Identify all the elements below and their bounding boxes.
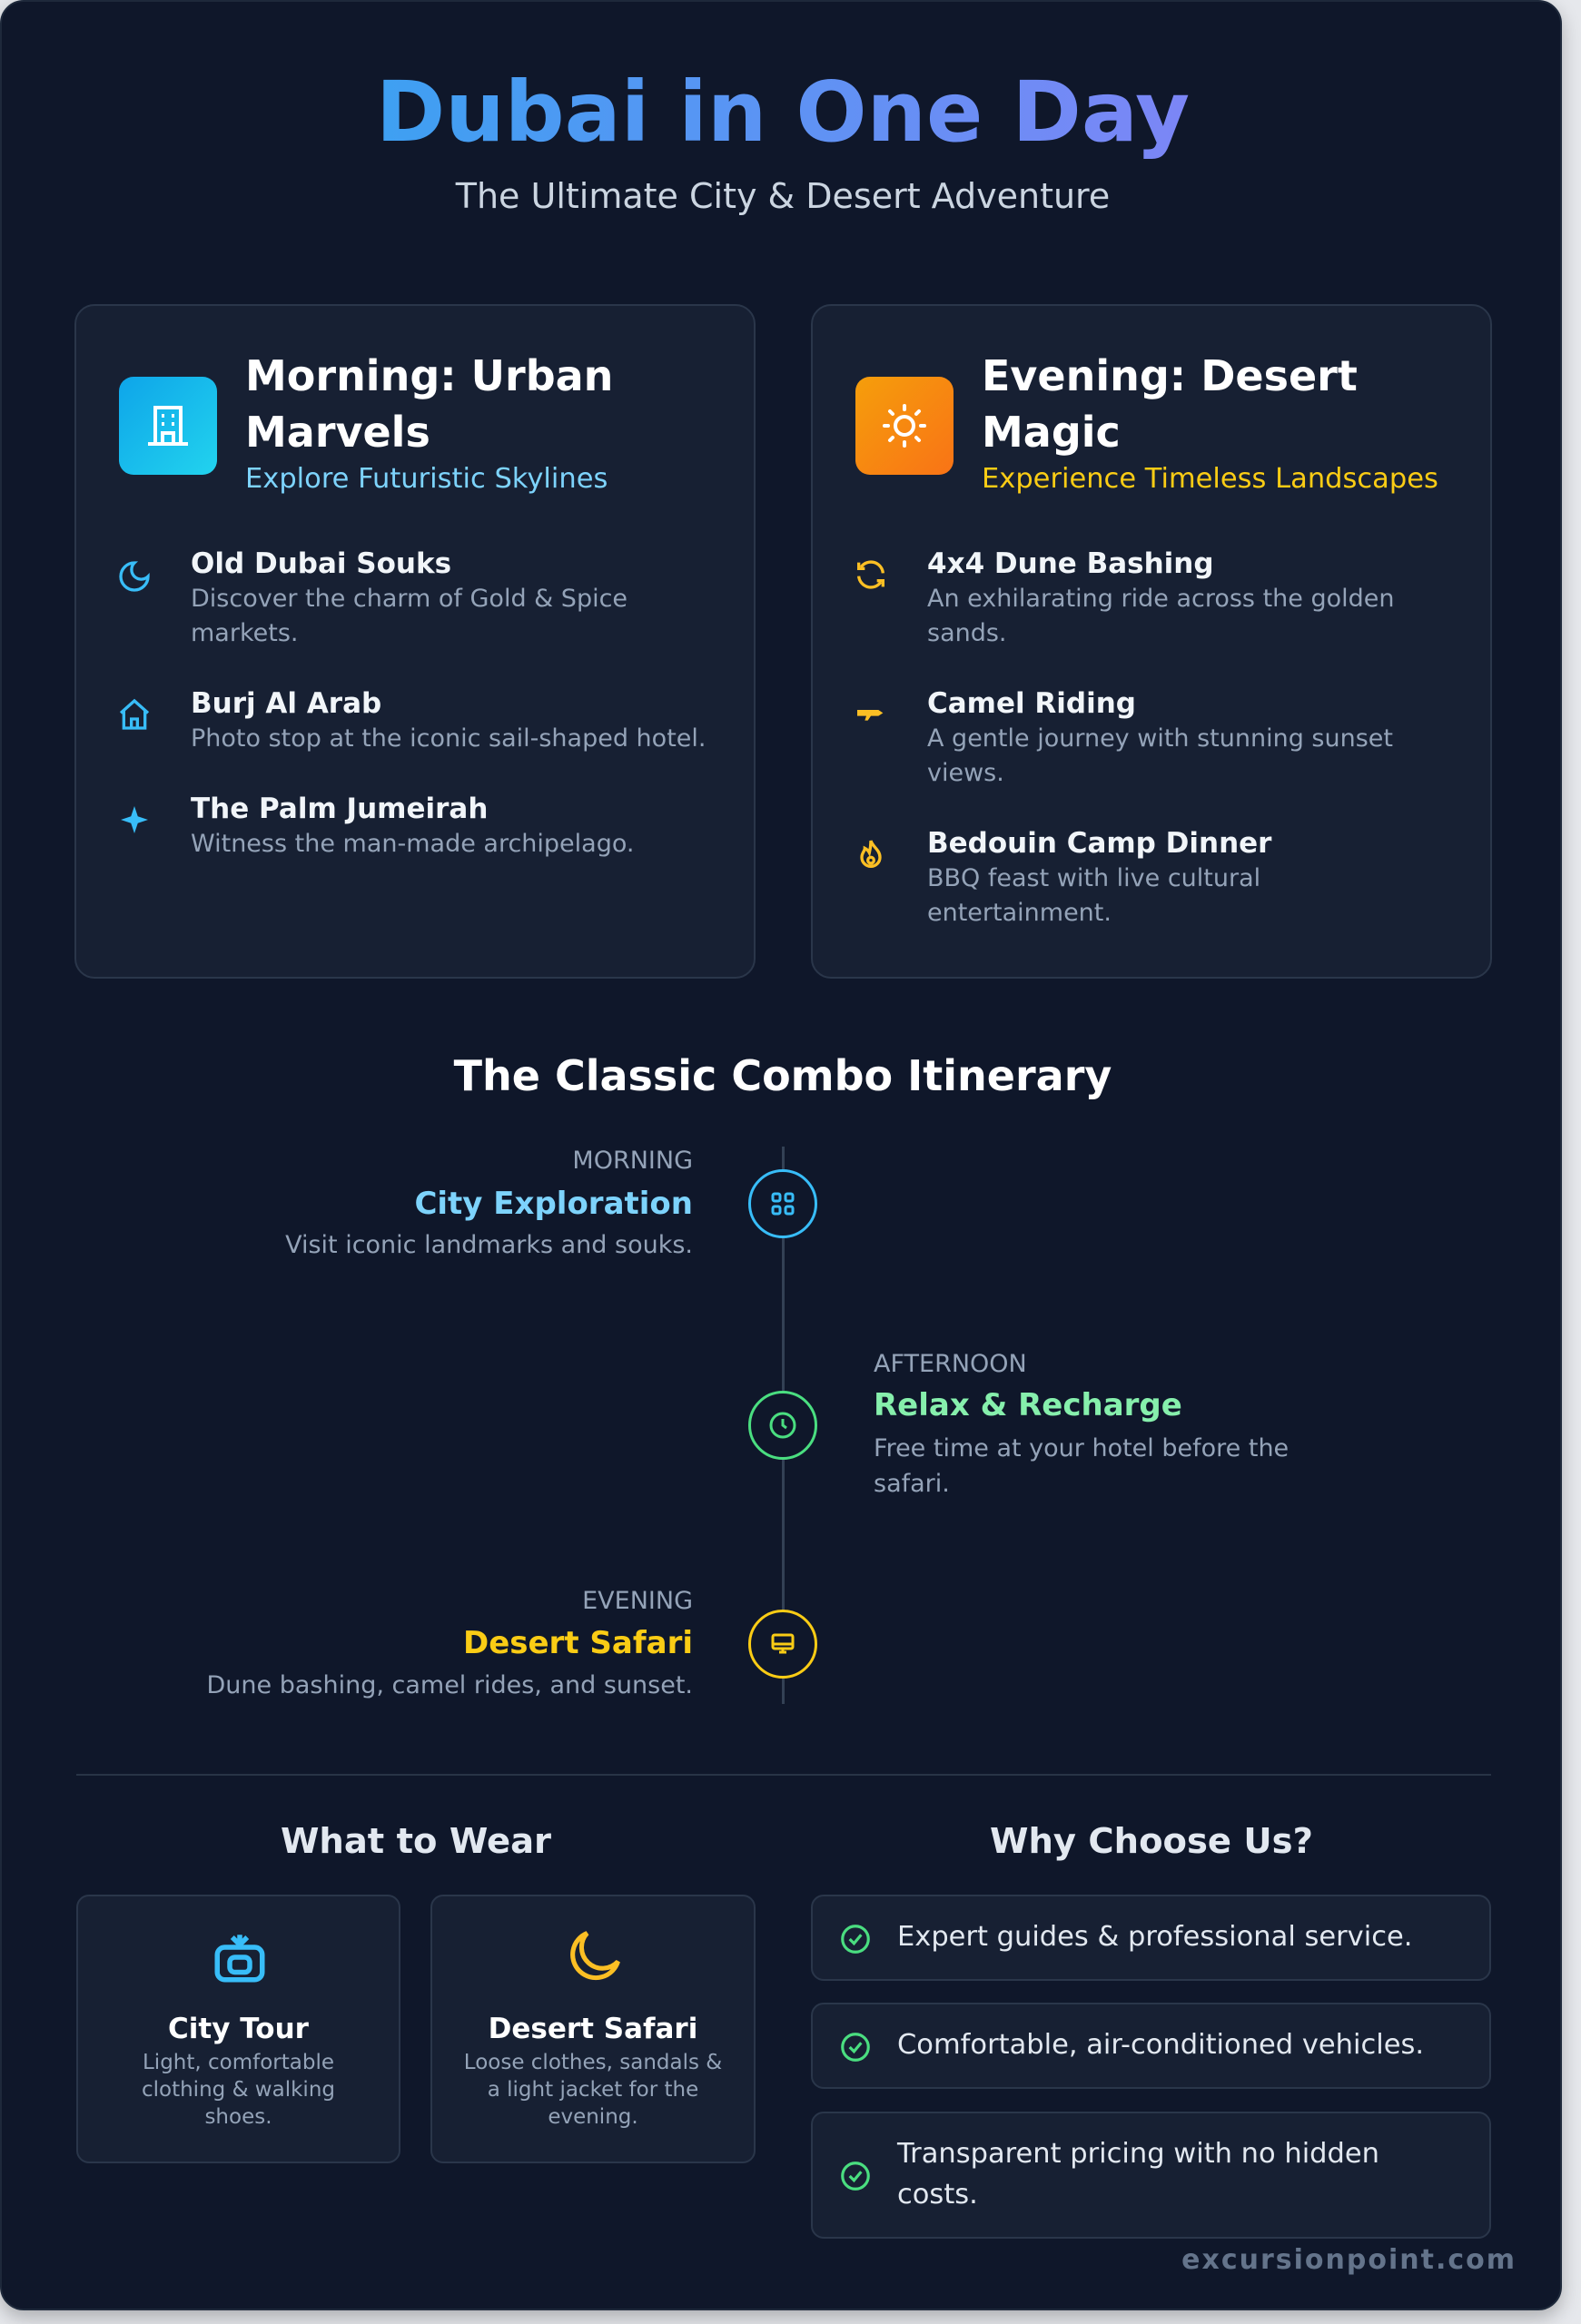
step: morning: MORNING xyxy=(572,1147,693,1175)
icon: sparkle xyxy=(121,806,148,833)
subheading: Experience Timeless Landscapes xyxy=(982,463,1438,495)
icon: refresh xyxy=(857,560,884,589)
step: morning: Visit iconic landmarks and souks. xyxy=(285,1231,693,1259)
heading: Evening: Desert xyxy=(982,351,1358,400)
benefit 3 xyxy=(811,2112,1491,2239)
item: souks xyxy=(119,547,627,647)
card: desert safari: Desert Safari xyxy=(489,2013,697,2045)
card: city tour: City Tour xyxy=(168,2013,309,2045)
item: dinner: BBQ feast with live cultural entertainment. xyxy=(927,864,1260,927)
icon: moon xyxy=(119,561,150,592)
item: palm xyxy=(121,793,634,858)
icon: camel xyxy=(857,710,883,721)
item: camel: A gentle journey with stunning sunset views. xyxy=(927,724,1393,787)
section heading: itinerary: The Classic Combo Itinerary xyxy=(454,1051,1112,1100)
step: afternoon: Relax & Recharge xyxy=(874,1387,1182,1423)
icon: clock circle xyxy=(748,1391,817,1460)
item: dune bashing: 4x4 Dune Bashing xyxy=(927,547,1214,580)
benefit 1: Expert guides & professional service. xyxy=(897,1921,1412,1953)
step: afternoon xyxy=(748,1350,1289,1498)
card: city tour: Light, comfortable clothing & walking shoes. xyxy=(142,2051,335,2129)
step: afternoon: AFTERNOON xyxy=(874,1350,1027,1378)
icon: grid circle xyxy=(748,1169,817,1238)
item: camel: Camel Riding xyxy=(927,687,1136,720)
item: dune bashing: An exhilarating ride across the golden sands. xyxy=(927,585,1395,647)
item: palm: Witness the man-made archipelago. xyxy=(191,830,634,858)
card: desert safari xyxy=(430,1895,756,2163)
heading: Marvels xyxy=(245,408,430,457)
step: evening: Desert Safari xyxy=(463,1625,693,1661)
item: burj al arab xyxy=(120,687,706,753)
icon: house xyxy=(120,699,149,730)
icon: sun xyxy=(855,377,954,475)
item: souks: Old Dubai Souks xyxy=(191,547,451,580)
icon: flame xyxy=(860,841,882,868)
heading xyxy=(982,351,1358,457)
heading: Magic xyxy=(982,408,1121,457)
step: morning: City Exploration xyxy=(414,1186,693,1222)
icon: city tour xyxy=(214,1935,265,1983)
benefit 3: Transparent pricing with no hidden costs. xyxy=(897,2138,1379,2211)
item: camel xyxy=(857,687,1393,787)
benefit 1 xyxy=(811,1895,1491,1981)
heading: what to wear: What to Wear xyxy=(281,1821,551,1862)
item: dinner: Bedouin Camp Dinner xyxy=(927,827,1271,860)
panel: morning xyxy=(74,304,756,979)
item: burj al arab: Burj Al Arab xyxy=(191,687,381,720)
icon: building xyxy=(119,377,217,475)
step: afternoon: Free time at your hotel before the safari. xyxy=(874,1434,1289,1498)
item: palm: The Palm Jumeirah xyxy=(191,793,488,825)
item: dinner xyxy=(860,827,1271,927)
heading: Morning: Urban xyxy=(245,351,613,400)
icon: moon xyxy=(570,1931,620,1981)
timeline xyxy=(782,1147,785,1704)
icon: monitor circle xyxy=(748,1610,817,1679)
card: city tour xyxy=(76,1895,400,2163)
card: desert safari: Loose clothes, sandals & a light jacket for the evening. xyxy=(464,2051,722,2129)
item: souks: Discover the charm of Gold & Spice markets. xyxy=(191,585,627,647)
item: dune bashing xyxy=(857,547,1395,647)
title: Dubai in One Day xyxy=(376,64,1190,161)
item: burj al arab: Photo stop at the iconic sail-shaped hotel. xyxy=(191,724,706,753)
benefit 2 xyxy=(811,2003,1491,2089)
panel: evening xyxy=(811,304,1492,979)
step: evening: EVENING xyxy=(582,1587,693,1615)
benefit 2: Comfortable, air-conditioned vehicles. xyxy=(897,2029,1424,2061)
heading xyxy=(245,351,613,457)
step: evening xyxy=(207,1587,817,1699)
heading: why choose us: Why Choose Us? xyxy=(990,1821,1313,1862)
subtitle: The Ultimate City & Desert Adventure xyxy=(456,176,1110,216)
footer: excursionpoint.com xyxy=(1181,2244,1517,2276)
step: evening: Dune bashing, camel rides, and sunset. xyxy=(207,1671,693,1699)
step: morning xyxy=(285,1147,817,1259)
subheading: Explore Futuristic Skylines xyxy=(245,463,608,495)
